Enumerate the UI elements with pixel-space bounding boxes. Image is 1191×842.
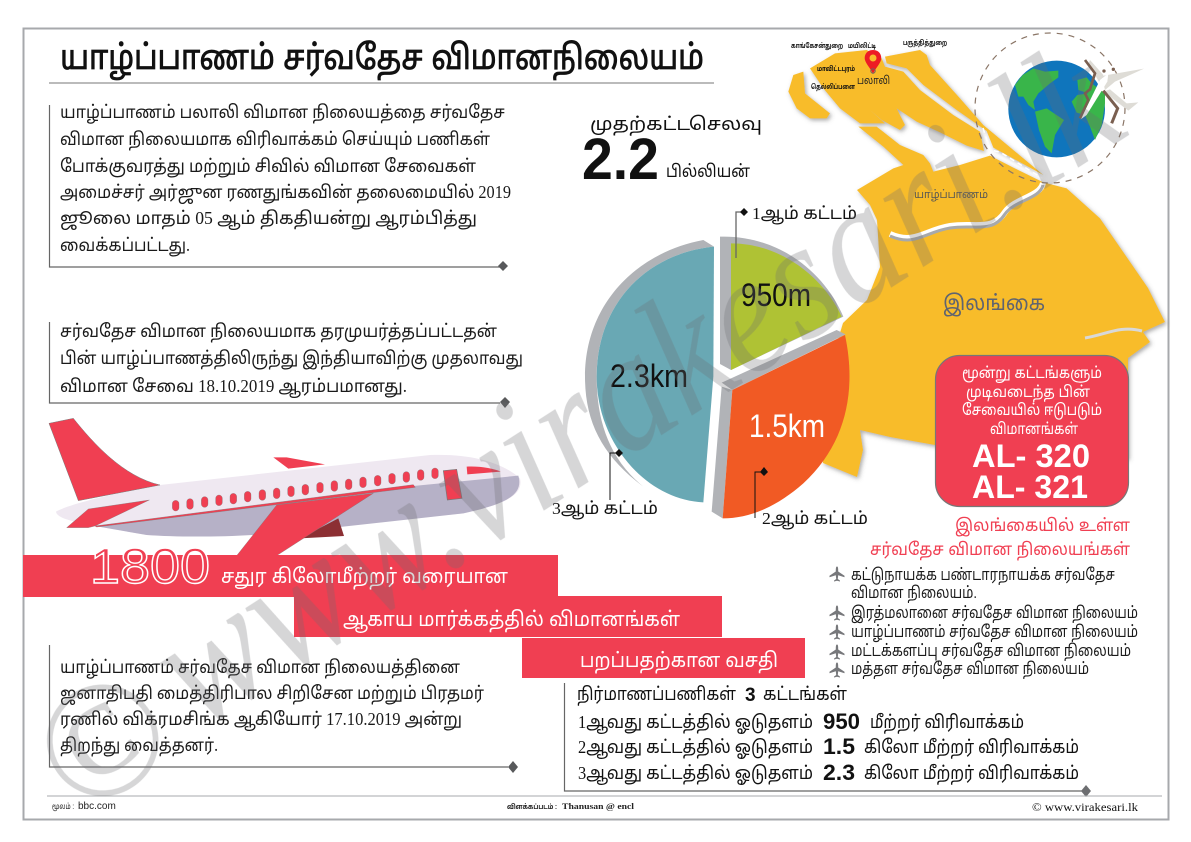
text block: expansion works: வைக்கப்பட்டது.	[60, 235, 190, 257]
text block: expansion works	[50, 102, 511, 271]
pie chart: 2.3km	[610, 358, 688, 394]
construction phases: கிலோ மீற்றர் விரிவாக்கம்	[864, 763, 1079, 785]
airplane illustration	[49, 418, 520, 556]
text block: opening	[50, 645, 518, 773]
text block: opening: ஜனாதிபதி மைத்திரிபால சிறிசேன மற்றும் பிரதமர்	[60, 683, 484, 705]
callout: aircraft types: சேவையில் ஈடுபடும்	[962, 402, 1102, 420]
icon: globe	[1008, 61, 1105, 157]
text block: opening: திறந்து வைத்தனர்.	[60, 735, 218, 757]
construction phases: 1ஆவது கட்டத்தில் ஓடுதளம்	[578, 712, 813, 735]
airport list	[830, 566, 1138, 679]
callout: aircraft types: AL- 321	[972, 469, 1088, 505]
text block: expansion works: யாழ்ப்பாணம் பலாலி விமான நிலையத்தை சர்வதேச	[60, 102, 505, 124]
map place labels: மாவிட்டபுரம்	[817, 65, 855, 73]
red banners: ஆகாய மார்க்கத்தில் விமானங்கள்	[343, 609, 681, 633]
airport list heading: சர்வதேச விமான நிலையங்கள்	[870, 540, 1130, 561]
text block: expansion works: ஜூலை மாதம் 05 ஆம் திகதியன்று ஆரம்பித்து	[60, 208, 477, 230]
construction phases: கிலோ மீற்றர் விரிவாக்கம்	[864, 737, 1079, 759]
airport list: விமான நிலையம்.	[851, 585, 977, 603]
map place labels: யாழ்ப்பாணம்	[914, 188, 988, 202]
construction phases: 1.5	[823, 734, 855, 759]
construction phases: 3	[745, 685, 756, 706]
footer: Thanusan @ encl	[562, 802, 635, 811]
icon: location pin	[865, 50, 881, 74]
footer	[47, 796, 1162, 814]
title: யாழ்ப்பாணம் சர்வதேச விமானநிலையம்	[60, 39, 704, 80]
airport list: கட்டுநாயக்க பண்டாரநாயக்க சர்வதேச	[851, 566, 1115, 586]
pie chart: 950m	[741, 277, 811, 313]
pie chart	[552, 204, 868, 531]
callout: aircraft types	[936, 356, 1128, 506]
text block: opening: யாழ்ப்பாணம் சர்வதேச விமான நிலையத்தினை	[60, 657, 460, 679]
footer: மூலம் :	[52, 802, 74, 811]
initial cost	[582, 114, 762, 192]
map place labels: பலாலி	[857, 75, 890, 87]
footer: விளக்கப்படம் :	[507, 803, 557, 811]
callout: phase 3: 3ஆம் கட்டம்	[552, 499, 658, 521]
red banners: பறப்பதற்கான வசதி	[580, 650, 778, 674]
watermark: www.virakesari.lk	[116, 3, 1153, 763]
text block: expansion works: அமைச்சர் அர்ஜுன ரணதுங்கவின் தலைமையில் 2019	[60, 182, 511, 204]
construction phases: 950	[823, 709, 860, 734]
text block: first flight to India: சர்வதேச விமான நிலையமாக தரமுயர்த்தப்பட்டதன்	[60, 321, 497, 343]
construction phases: 3ஆவது கட்டத்தில் ஓடுதளம்	[578, 763, 813, 786]
callout: aircraft types: மூன்று கட்டங்களும்	[962, 365, 1102, 384]
construction phases	[564, 683, 1091, 797]
text block: expansion works: போக்குவரத்து மற்றும் சிவில் விமான சேவைகள்	[60, 156, 476, 178]
callout: aircraft types: விமானங்கள்	[990, 421, 1078, 438]
text block: opening: ரணில் விக்ரமசிங்க ஆகியோர் 17.10.2019 அன்று	[60, 709, 462, 731]
construction phases: மீற்றர் விரிவாக்கம்	[870, 712, 1024, 734]
callout: aircraft types: AL- 320	[972, 438, 1090, 474]
construction phases: 2.3	[823, 760, 855, 785]
red banners: சதுர கிலோமீற்றர் வரையான	[221, 565, 508, 590]
initial cost: 2.2	[582, 127, 659, 192]
map place labels: காங்கேசன்துறை	[791, 42, 843, 50]
red banners: 1800	[90, 538, 210, 594]
callout: phase 3	[552, 449, 658, 521]
airport list heading: இலங்கையில் உள்ள	[955, 516, 1130, 537]
airport list: மத்தள சர்வதேச விமான நிலையம்	[851, 660, 1089, 679]
callout: phase 2	[755, 467, 868, 531]
map place labels: இலங்கை	[943, 292, 1045, 317]
footer: bbc.com	[78, 801, 116, 812]
construction phases: கட்டங்கள்	[763, 684, 847, 704]
initial cost: முதற்கட்டசெலவு	[590, 114, 762, 136]
footer: © www.virakesari.lk	[1032, 800, 1138, 814]
construction phases: 2ஆவது கட்டத்தில் ஓடுதளம்	[578, 737, 813, 760]
initial cost: பில்லியன்	[666, 162, 750, 181]
callout: phase 1: 1ஆம் கட்டம்	[752, 204, 857, 226]
callout: phase 2: 2ஆம் கட்டம்	[762, 509, 868, 531]
text block: first flight to India: விமான சேவை 18.10.2019 ஆரம்பமானது.	[60, 376, 407, 398]
text block: expansion works: விமான நிலையமாக விரிவாக்கம் செய்யும் பணிகள்	[60, 129, 490, 151]
pie chart: 1.5km	[749, 408, 825, 444]
text block: first flight to India	[50, 321, 523, 408]
map of Jaffna and Sri Lanka	[788, 33, 1165, 477]
airport list: யாழ்ப்பாணம் சர்வதேச விமான நிலையம்	[851, 623, 1138, 643]
map place labels: தெல்லிப்பளை	[811, 83, 856, 91]
icon: airplane over globe	[1080, 60, 1144, 123]
text block: first flight to India: பின் யாழ்ப்பாணத்திலிருந்து இந்தியாவிற்கு முதலாவது	[60, 348, 523, 370]
callout: aircraft types: முடிவடைந்த பின்	[966, 384, 1090, 402]
dashed flight circle	[975, 33, 1125, 183]
callout: phase 1	[736, 204, 857, 258]
red banners	[23, 538, 805, 678]
map place labels: மயிலிட்டி	[848, 42, 876, 50]
airport list: மட்டக்களப்பு சர்வதேச விமான நிலையம்	[851, 642, 1131, 661]
map place labels: பருத்தித்துறை	[903, 39, 947, 47]
construction phases: நிர்மாணப்பணிகள்	[577, 684, 736, 706]
map place labels	[791, 39, 1045, 317]
airport list heading	[870, 516, 1130, 561]
